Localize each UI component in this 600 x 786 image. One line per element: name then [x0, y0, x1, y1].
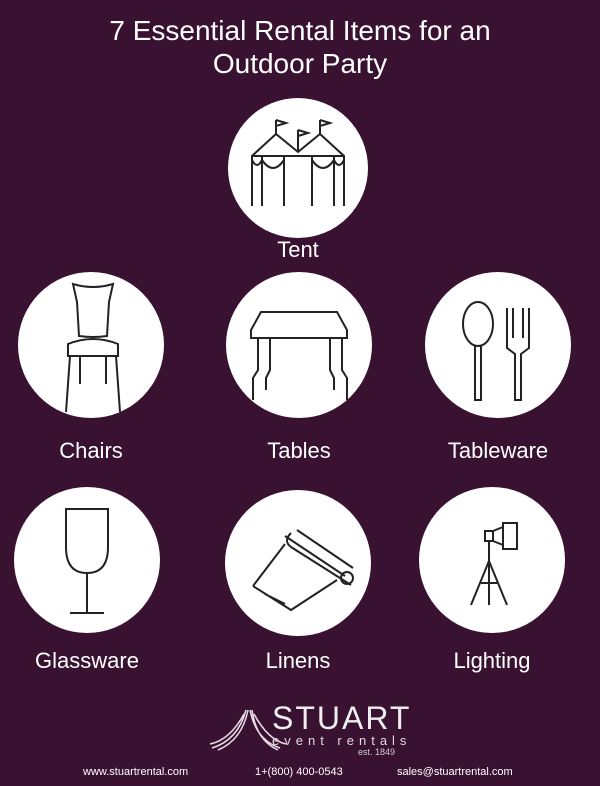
icon: glassware [14, 487, 160, 633]
title [109, 15, 491, 79]
icon: tent [228, 98, 368, 238]
title: Outdoor Party [213, 48, 387, 79]
logo: event rentals [272, 733, 411, 748]
label: chairs: Chairs [59, 438, 123, 463]
label: glassware: Glassware [35, 648, 139, 673]
logo: STUART [272, 700, 411, 736]
icon: linens [225, 490, 371, 636]
logo: est. 1849 [358, 747, 395, 757]
icon: tableware [425, 272, 571, 418]
label: tent: Tent [277, 237, 319, 262]
icon: lighting [419, 487, 565, 633]
icon: chair [18, 272, 164, 418]
footer: phone: 1+(800) 400-0543 [255, 766, 343, 778]
footer: email: sales@stuartrental.com [397, 766, 513, 778]
footer: website: www.stuartrental.com [83, 766, 188, 778]
label: linens: Linens [266, 648, 330, 673]
label: tableware: Tableware [448, 438, 548, 463]
title: 7 Essential Rental Items for an [109, 15, 491, 46]
label: lighting: Lighting [453, 648, 531, 673]
logo [210, 700, 411, 757]
icon: tables [226, 272, 372, 418]
label: tables: Tables [267, 438, 331, 463]
